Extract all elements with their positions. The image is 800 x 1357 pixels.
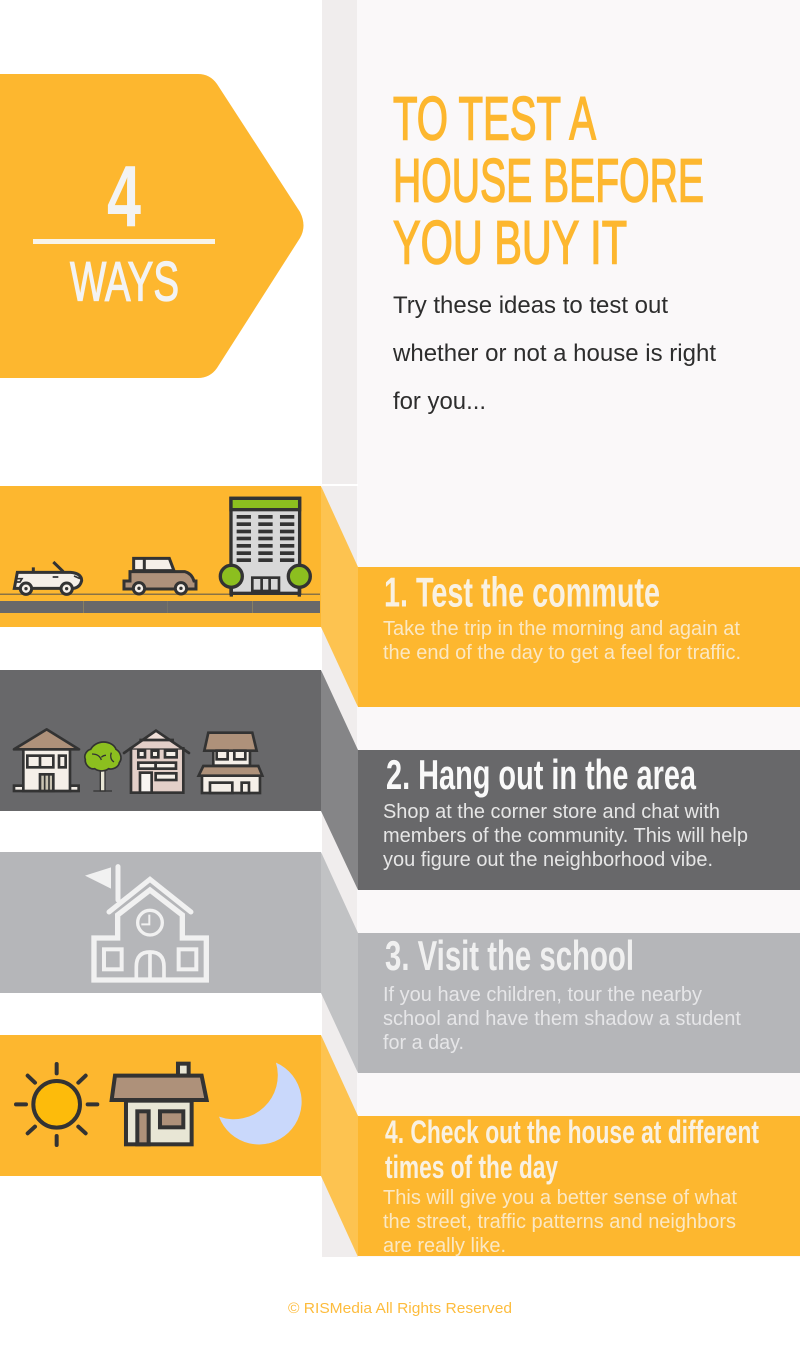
step 1 description: Take the trip in the morning and again at — [383, 618, 740, 640]
panel: step 1 illustration — [0, 486, 321, 627]
step 3 description: for a day. — [383, 1032, 464, 1054]
step 3 description: If you have children, tour the nearby — [383, 984, 702, 1006]
panel: step 2 illustration — [0, 670, 321, 811]
badge word: WAYS — [70, 250, 179, 312]
step 4 description: This will give you a better sense of what — [383, 1187, 737, 1209]
icon: school — [85, 867, 206, 980]
intro text: for you... — [393, 388, 486, 415]
badge number: 4 — [107, 148, 141, 245]
panel: header badge — [0, 74, 304, 378]
road — [0, 594, 320, 613]
panel: step 4 text — [358, 1114, 800, 1257]
icon: convertible car — [14, 562, 82, 594]
step 2 description: members of the community. This will help — [383, 825, 748, 847]
step 2 description — [383, 801, 748, 871]
icon: white house — [14, 729, 79, 791]
step 2 description: you figure out the neighborhood vibe. — [383, 849, 713, 871]
step 4 heading: times of the day — [385, 1149, 558, 1185]
ribbon: step 1 fold — [321, 486, 358, 707]
step 3 heading: 3. Visit the school — [385, 932, 634, 979]
ribbon: step 4 fold — [321, 1035, 358, 1257]
icon: small house — [112, 1064, 207, 1144]
step 1 heading: 1. Test the commute — [384, 568, 660, 616]
step 4 description — [383, 1187, 737, 1257]
intro text: whether or not a house is right — [392, 340, 716, 367]
step 4 description: the street, traffic patterns and neighbors — [383, 1211, 736, 1233]
panel: step 2 text — [358, 750, 800, 890]
step 3 description — [383, 984, 741, 1054]
panel: step 4 illustration — [0, 1035, 321, 1176]
title: TO TEST A — [393, 84, 596, 152]
intro text: Try these ideas to test out — [393, 292, 668, 319]
panel: step 1 text — [358, 567, 800, 707]
step 3 description: school and have them shadow a student — [383, 1008, 741, 1030]
intro text — [392, 292, 716, 415]
title — [393, 84, 704, 276]
icon: sun — [16, 1064, 97, 1145]
badge rule — [33, 239, 215, 244]
panel: step 3 illustration — [0, 852, 321, 993]
footer credit: © RISMedia All Rights Reserved — [288, 1301, 512, 1317]
title: YOU BUY IT — [393, 208, 627, 276]
icon: green tree — [85, 742, 121, 791]
step 1 description — [383, 618, 741, 664]
step 1 description: the end of the day to get a feel for traffic. — [383, 642, 741, 664]
icon: two storey house — [199, 733, 262, 793]
icon: office building with trees — [220, 498, 310, 597]
step 4 description: are really like. — [383, 1235, 506, 1257]
icon: pink house — [124, 731, 189, 793]
step 2 description: Shop at the corner store and chat with — [383, 801, 720, 823]
ribbon: step 3 fold — [321, 852, 358, 1073]
step 4 heading — [385, 1114, 759, 1185]
icon: brown car — [124, 558, 196, 594]
ribbon: step 2 fold — [321, 670, 358, 890]
panel: step 3 text — [358, 932, 800, 1073]
badge shape — [0, 74, 304, 378]
icon: crescent moon — [219, 1063, 302, 1144]
